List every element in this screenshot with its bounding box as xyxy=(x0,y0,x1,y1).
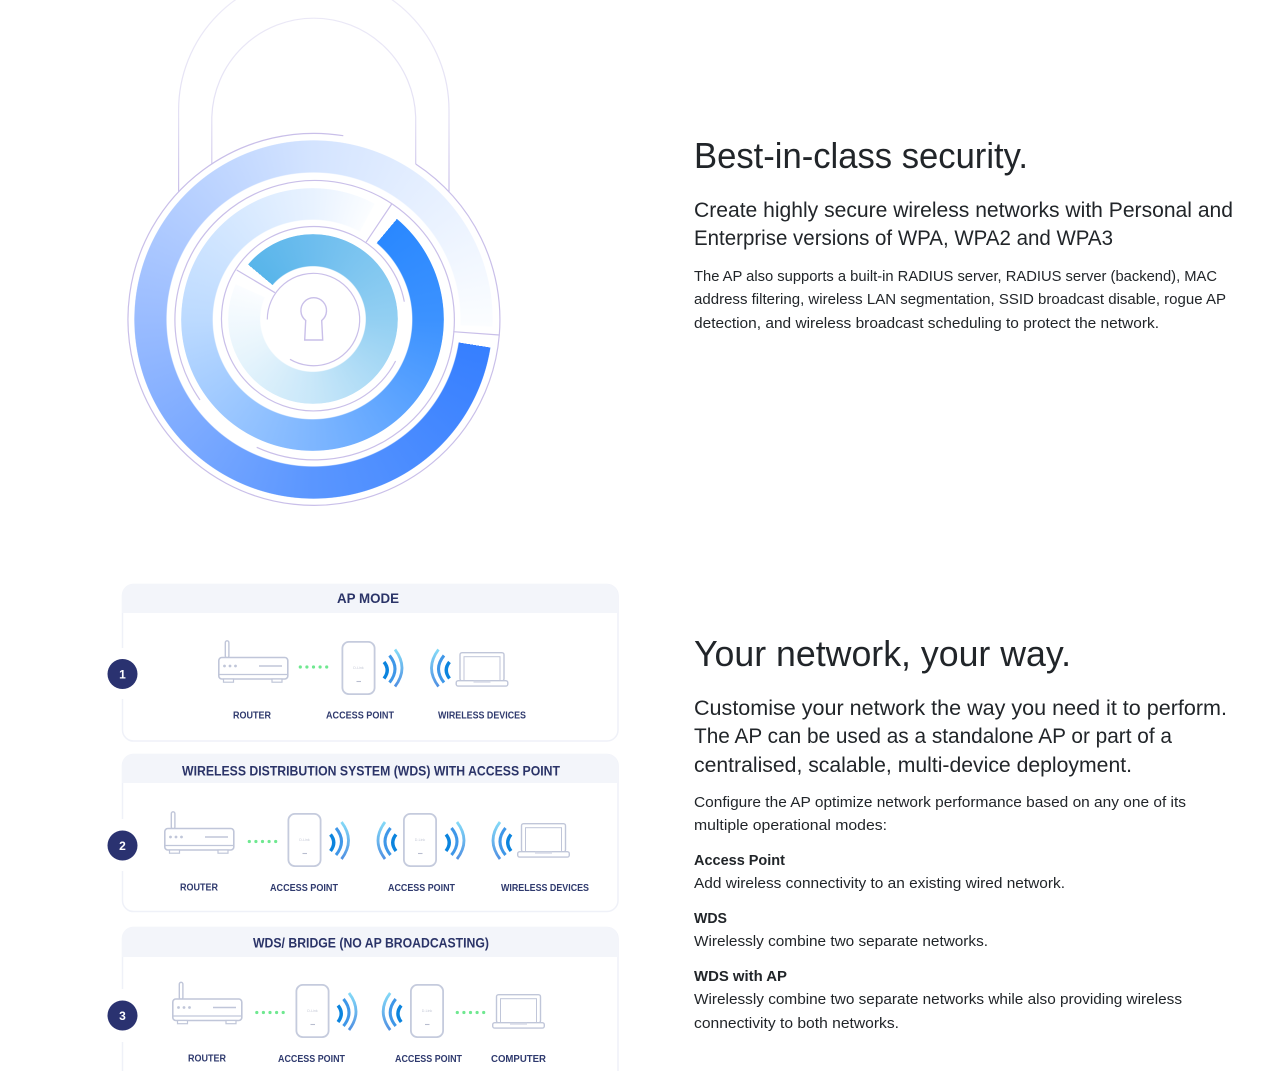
label: access point: ACCESS POINT xyxy=(395,1053,462,1065)
mode: WDS with AP: WDS with AP xyxy=(694,968,787,985)
padlock outlines and keyhole xyxy=(127,0,500,506)
icon: incoming signal waves xyxy=(383,993,401,1030)
lead paragraph: security xyxy=(694,199,1233,250)
badge 1 xyxy=(108,659,138,689)
lead paragraph: network xyxy=(694,697,1227,777)
icon: wired link dots xyxy=(248,840,277,843)
lead paragraph: network: The AP can be used as a standalone AP or part of a xyxy=(694,725,1172,748)
icon: access point xyxy=(288,814,321,866)
mode: WDS: Wirelessly combine two separate networks. xyxy=(694,933,988,950)
illustration: padlock with concentric rings xyxy=(127,0,500,506)
icon: laptop xyxy=(456,653,508,686)
body paragraph: security: address filtering, wireless LAN segmentation, SSID broadcast disable, rogue AP xyxy=(694,291,1226,308)
mode: WDS: WDS xyxy=(694,910,727,927)
lead paragraph: security: Create highly secure wireless networks with Personal and xyxy=(694,199,1233,222)
icon: incoming signal waves xyxy=(493,822,511,859)
icon: incoming signal waves xyxy=(378,822,396,859)
badge 3: 3 xyxy=(119,1009,126,1023)
icon: access point xyxy=(404,814,436,866)
icon: wired link dots xyxy=(255,1011,285,1014)
label: access point: ACCESS POINT xyxy=(278,1053,345,1065)
lead paragraph: network: Customise your network the way you need it to perform. xyxy=(694,697,1227,720)
body paragraph: security: detection, and wireless broadcast scheduling to protect the network. xyxy=(694,315,1159,332)
icon: incoming signal waves xyxy=(432,650,450,686)
text block: network modes xyxy=(694,633,1227,1032)
body paragraph: network xyxy=(694,794,1186,834)
icon: router xyxy=(173,982,242,1024)
mode: WDS with AP: Wirelessly combine two separate networks while also providing wireless xyxy=(694,991,1182,1008)
text block: security xyxy=(694,135,1233,332)
mode: access point: Access Point xyxy=(694,852,785,869)
badge 2: 2 xyxy=(119,839,126,853)
badge 2 xyxy=(108,830,138,860)
icon: laptop xyxy=(518,824,569,857)
mode: WDS xyxy=(694,910,988,950)
icon: wired link dots xyxy=(456,1011,485,1014)
label: computer: COMPUTER xyxy=(491,1053,546,1065)
icon: access point xyxy=(296,985,329,1037)
icon: signal waves xyxy=(446,822,464,859)
icon: access point xyxy=(411,985,443,1037)
icon: wired link dots xyxy=(299,665,328,669)
heading: WDS bridge: WDS/ BRIDGE (NO AP BROADCASTING) xyxy=(253,936,489,950)
icon: access point xyxy=(342,642,375,694)
icon: signal waves xyxy=(384,650,402,686)
heading: security: Best-in-class security. xyxy=(694,135,1028,176)
icon: signal waves xyxy=(338,993,356,1030)
lead paragraph: network: centralised, scalable, multi-device deployment. xyxy=(694,754,1132,777)
panel: AP mode xyxy=(108,584,618,741)
panel: WDS bridge xyxy=(108,927,618,1071)
heading: WDS with access point: WIRELESS DISTRIBUTION SYSTEM (WDS) WITH ACCESS POINT xyxy=(182,764,561,778)
body paragraph: security xyxy=(694,268,1226,332)
lead paragraph: security: Enterprise versions of WPA, WPA2 and WPA3 xyxy=(694,227,1113,250)
body paragraph: network: multiple operational modes: xyxy=(694,817,887,834)
label: access point: ACCESS POINT xyxy=(388,882,455,894)
label: wireless devices: WIRELESS DEVICES xyxy=(501,882,589,894)
body paragraph: network: Configure the AP optimize network performance based on any one of its xyxy=(694,794,1186,811)
label: router: ROUTER xyxy=(188,1052,226,1064)
label: router: ROUTER xyxy=(180,882,218,894)
icon: laptop xyxy=(493,995,544,1028)
panel: WDS with access point xyxy=(108,754,618,912)
icon: router xyxy=(219,641,288,682)
outer gradient ring xyxy=(134,140,493,499)
icon: signal waves xyxy=(330,822,348,859)
heading: network: Your network, your way. xyxy=(694,633,1071,674)
badge 3 xyxy=(108,1000,138,1030)
label: router: ROUTER xyxy=(233,710,271,722)
body paragraph: security: The AP also supports a built-in RADIUS server, RADIUS server (backend), MAC xyxy=(694,268,1217,285)
label: wireless devices: WIRELESS DEVICES xyxy=(438,710,526,722)
label: access point: ACCESS POINT xyxy=(326,710,395,722)
icon: router xyxy=(165,812,234,853)
mode: access point: Add wireless connectivity to an existing wired network. xyxy=(694,875,1065,892)
heading: AP mode: AP MODE xyxy=(337,591,399,606)
mode: WDS with AP: connectivity to both networks. xyxy=(694,1015,899,1032)
mode: WDS with AP xyxy=(694,968,1182,1032)
mode: access point xyxy=(694,852,1065,892)
label: access point: ACCESS POINT xyxy=(270,882,339,894)
middle gradient ring xyxy=(181,188,444,450)
badge 1: 1 xyxy=(119,667,126,681)
inner gradient ring xyxy=(228,234,398,404)
